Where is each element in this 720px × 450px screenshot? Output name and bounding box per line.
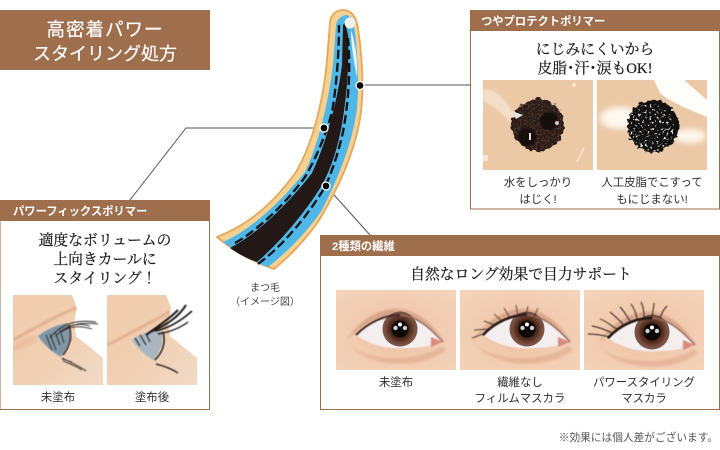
- subheading: power fix: [39, 231, 171, 287]
- lash caption: [230, 282, 300, 308]
- subheading: gloss: にじみにくいから: [536, 42, 654, 58]
- header: gloss protect polymer: つやプロテクトポリマー: [481, 15, 605, 28]
- header: power fix polymer: パワーフィックスポリマー: [13, 205, 147, 218]
- footnote: ※効果には個人差がございます。: [559, 431, 718, 444]
- photo: sebum rub test: [597, 80, 707, 170]
- subheading: power fix: スタイリング！: [54, 270, 156, 287]
- lash caption: （イメージ図）: [230, 296, 300, 308]
- captions: power fix: 塗布後: [135, 390, 170, 404]
- lash caption: まつ毛: [250, 282, 280, 294]
- captions: fiber: パワースタイリング: [593, 375, 695, 389]
- photo: after application profile: [107, 295, 197, 385]
- photo: eye without mascara: [336, 290, 456, 370]
- panel: two types of fiber: [320, 235, 720, 410]
- outer coating: [217, 10, 362, 269]
- fibers: [235, 25, 339, 243]
- photo: eye with power styling mascara: [584, 290, 704, 370]
- tip highlight: [344, 18, 356, 28]
- header: two types of fiber: 2種類の繊維: [332, 239, 395, 253]
- title banner: スタイリング処方: [33, 44, 177, 64]
- subheading: gloss: [536, 42, 654, 77]
- photo: before application profile: [13, 295, 103, 385]
- captions: gloss: 水をしっかり: [504, 176, 572, 189]
- subheading: power fix: 上向きカールに: [53, 251, 157, 268]
- captions: gloss: [504, 175, 703, 206]
- panel: gloss protect polymer: [470, 10, 720, 209]
- photo: eye with film mascara: [460, 290, 580, 370]
- blue polymer layer: [223, 15, 358, 267]
- captions: power fix: 未塗布: [41, 391, 75, 404]
- leader lines: [130, 85, 470, 235]
- captions: fiber: [379, 375, 695, 405]
- panel: power fix polymer: [0, 200, 210, 410]
- captions: fiber: フィルムマスカラ: [475, 392, 565, 405]
- header: power fix polymer: [0, 200, 210, 221]
- lash core: [230, 22, 348, 262]
- subheading: power fix: 適度なボリュームの: [39, 231, 171, 249]
- captions: fiber: 未塗布: [379, 376, 413, 389]
- header: two types of fiber: [320, 235, 720, 256]
- subheading: gloss: 皮脂･汗･涙もOK!: [537, 60, 653, 77]
- captions: fiber: マスカラ: [621, 392, 667, 405]
- captions: gloss: 人工皮脂でこすって: [601, 175, 703, 189]
- captions: fiber: 繊維なし: [497, 375, 543, 389]
- title banner: [0, 10, 210, 70]
- photo: water test: [483, 80, 593, 170]
- captions: gloss: もにじまない!: [616, 193, 688, 206]
- captions: power fix: [41, 390, 170, 404]
- eyelash cross-section diagram: [217, 10, 362, 269]
- title banner: 高密着パワー: [46, 19, 164, 40]
- header: gloss protect polymer: [470, 10, 720, 31]
- pointer dots: [320, 82, 364, 190]
- captions: gloss: はじく!: [519, 193, 557, 206]
- subheading: fiber: 自然なロング効果で目力サポート: [410, 266, 632, 283]
